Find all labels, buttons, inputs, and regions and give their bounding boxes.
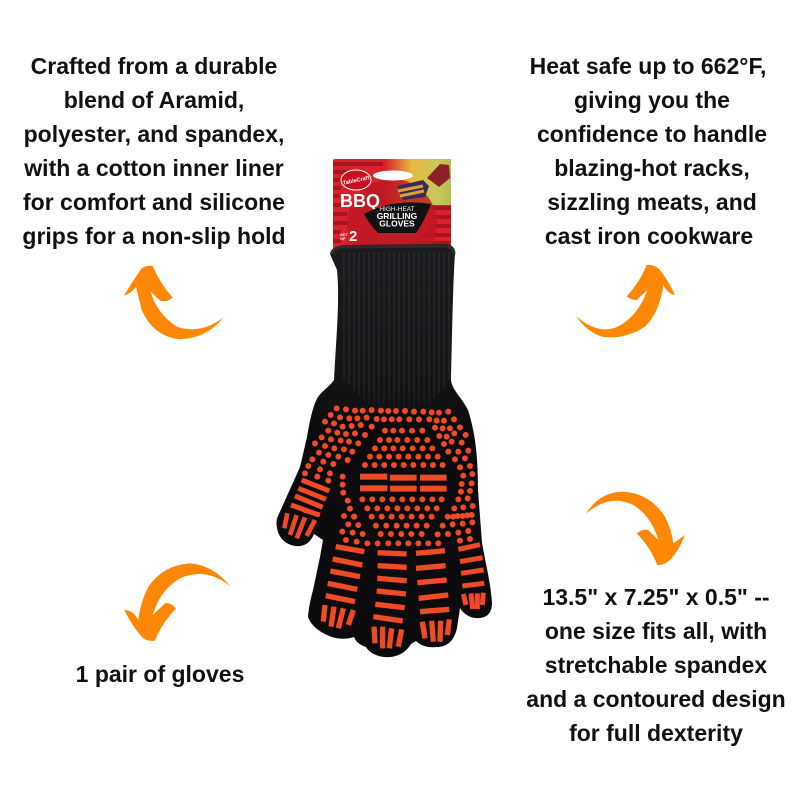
tag BBQ: BBQ: [340, 191, 380, 211]
text block: materials: with a cotton inner liner: [24, 155, 284, 181]
product tag: [333, 159, 451, 269]
arrow: bottom right: [586, 492, 685, 565]
text block: size: and a contoured design: [526, 686, 786, 712]
tag black label: [364, 202, 431, 233]
tag mitt image: [427, 164, 450, 187]
tag title: GRILLING: [377, 211, 418, 221]
text block: heat safety: [530, 53, 767, 249]
text block: size: for full dexterity: [569, 720, 743, 746]
tag title: [377, 206, 418, 228]
arrow: top left: [124, 266, 223, 339]
tag hang hole: [373, 170, 413, 180]
thumb tip bars: [284, 510, 320, 538]
cuff ribbing: [344, 252, 449, 410]
tag title: HIGH-HEAT: [379, 206, 415, 213]
tag set of 2: [340, 228, 357, 245]
text block: size: one size fits all, with: [545, 618, 767, 644]
text block: size: 13.5" x 7.25" x 0.5" --: [542, 584, 770, 610]
text block: materials: [22, 53, 286, 249]
text block: materials: grips for a non-slip hold: [22, 223, 286, 249]
tag set of 2: SET: [340, 232, 348, 237]
text block: heat safety: sizzling meats, and: [547, 189, 757, 215]
arrow: bottom left: [124, 563, 231, 641]
tag set of 2: 2: [349, 228, 357, 245]
glove silhouette: [276, 244, 492, 657]
arrow: top right: [576, 265, 675, 337]
text block: materials: blend of Aramid,: [64, 87, 244, 113]
text block: heat safety: blazing-hot racks,: [554, 155, 750, 181]
middle finger bars: [373, 553, 407, 648]
tag logo: TableCraft: [342, 175, 370, 187]
ring finger bars: [416, 551, 449, 642]
silicone dots upper: [305, 408, 473, 517]
text block: materials: Crafted from a durable: [31, 53, 277, 79]
text block: heat safety: giving you the: [574, 87, 730, 113]
index finger bars: [323, 547, 364, 628]
text block: size: [526, 584, 786, 746]
cuff hem: [332, 246, 454, 254]
thumb bars: [291, 480, 329, 515]
pinky finger bars: [458, 545, 484, 609]
tag food image: [397, 180, 429, 200]
palm bars: [360, 474, 447, 492]
tag set of 2: OF: [340, 236, 346, 241]
text block: heat safety: cast iron cookware: [545, 223, 753, 249]
glove: [276, 244, 492, 657]
text block: materials: polyester, and spandex,: [24, 121, 284, 147]
text block: materials: for comfort and silicone: [23, 189, 285, 215]
silicone dots lower and finger bars: [284, 510, 484, 648]
text block: size: stretchable spandex: [545, 652, 767, 678]
text block: quantity: 1 pair of gloves: [76, 661, 244, 687]
text block: heat safety: Heat safe up to 662°F,: [530, 53, 766, 79]
text block: heat safety: confidence to handle: [537, 121, 767, 147]
tag title: GLOVES: [379, 218, 415, 228]
